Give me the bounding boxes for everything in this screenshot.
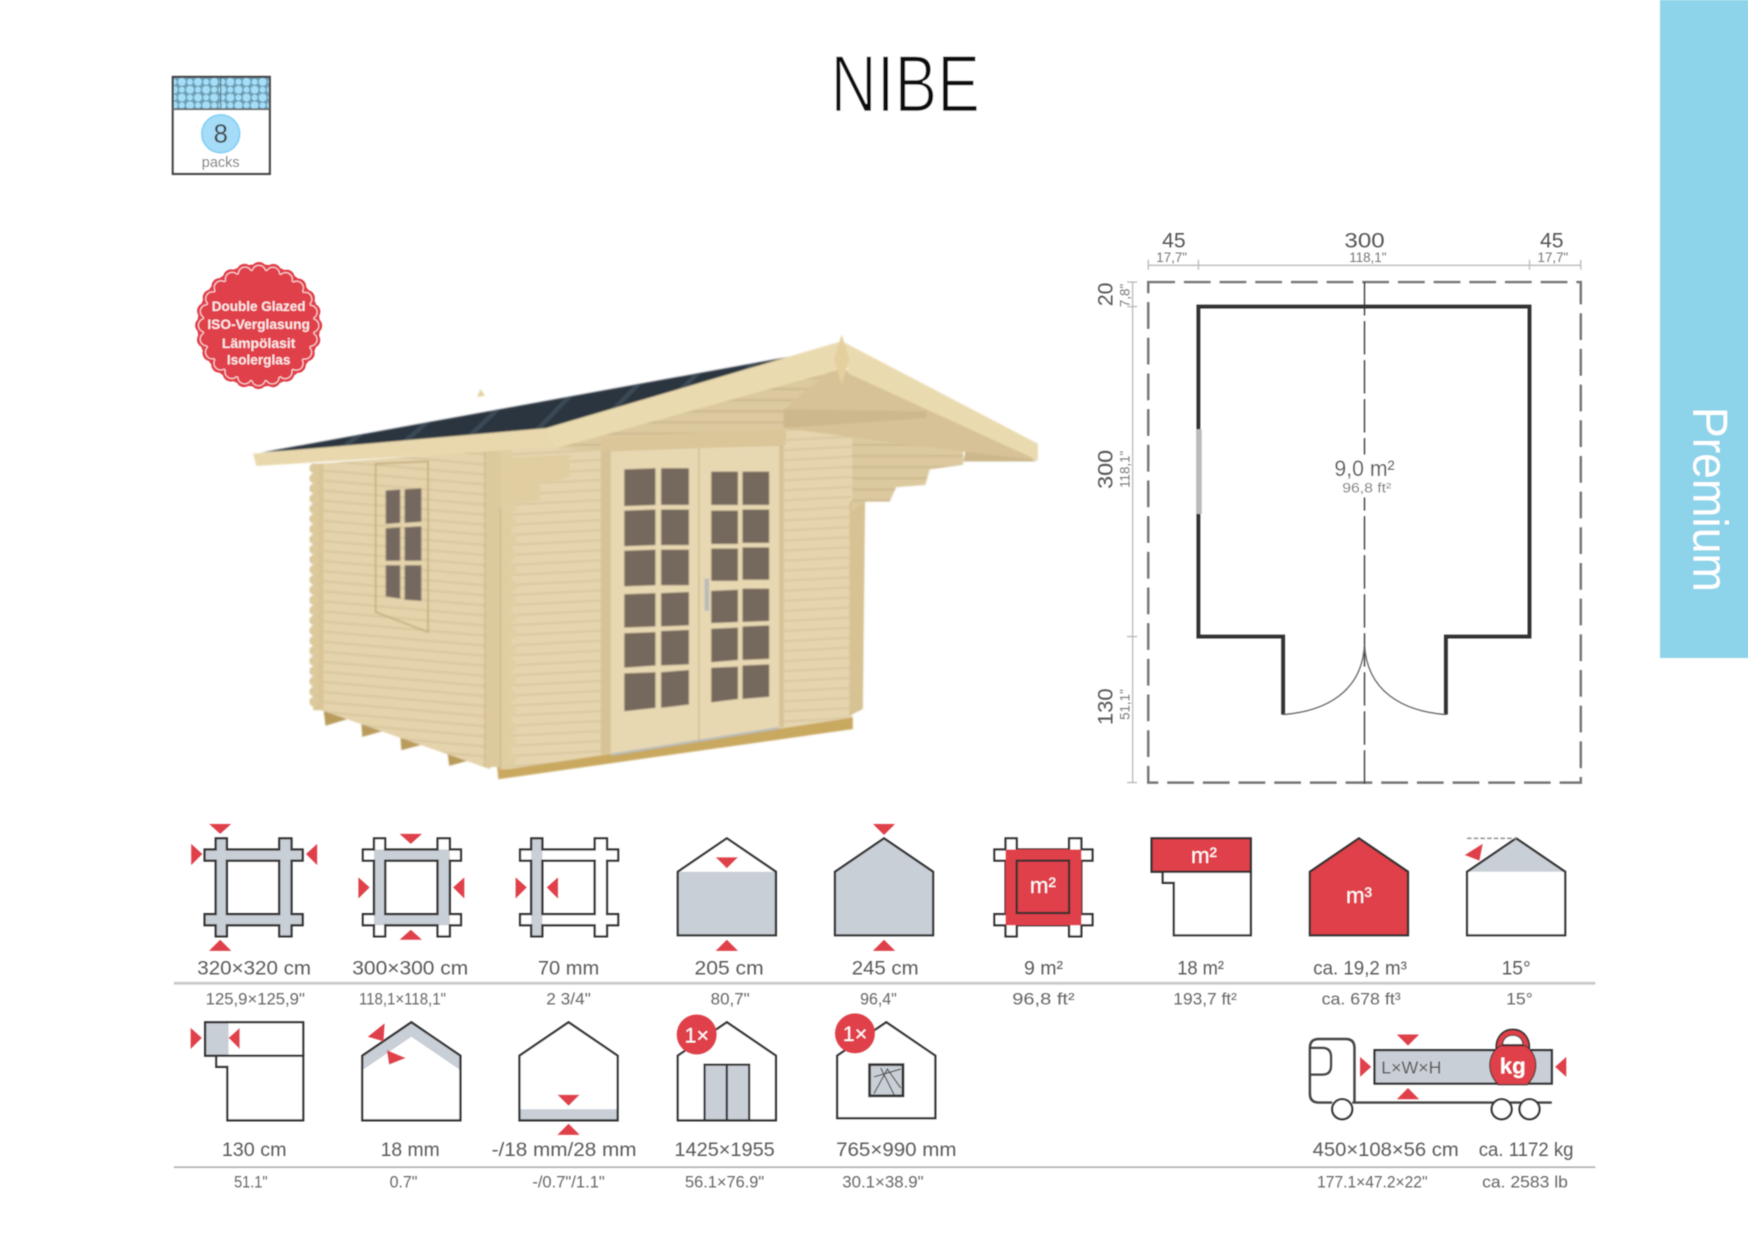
labels row 2: -/18 mm/28 mm	[492, 1140, 637, 1161]
small roof tip	[477, 389, 485, 397]
icon: inner footprint	[358, 834, 464, 940]
area label: 9,0 m²	[1334, 456, 1395, 481]
badge: double glazed: ISO-Verglasung	[207, 317, 310, 332]
left dimension: 118,1"	[1117, 450, 1132, 488]
icon: roof thickness	[362, 1022, 460, 1120]
top dimension: 45	[1540, 229, 1564, 252]
icon: 8 packs: packs	[202, 155, 240, 171]
labels row 1: 15°	[1506, 989, 1533, 1008]
labels row 2: 177.1×47.2×22"	[1317, 1172, 1428, 1191]
base board	[497, 717, 853, 779]
icon: floor thickness	[519, 1022, 618, 1135]
labels row 1: 9 m²	[1024, 958, 1063, 979]
icon: ridge height	[835, 824, 933, 951]
labels row 2: ca. 2583 lb	[1482, 1172, 1568, 1191]
labels row 1: 245 cm	[852, 958, 919, 979]
icon: wall height	[678, 838, 776, 951]
sleepers	[323, 708, 474, 766]
floor plan	[1095, 229, 1581, 785]
lintel	[601, 429, 786, 451]
labels row 2: 51.1"	[234, 1172, 268, 1191]
labels row 2: 18 mm	[381, 1140, 440, 1161]
labels row 2: 1425×1955	[674, 1140, 775, 1161]
labels row 2: 130 cm	[222, 1140, 287, 1161]
window	[376, 462, 428, 632]
window mark	[1196, 429, 1202, 514]
top dimension: 17,7"	[1538, 250, 1569, 265]
soffit	[784, 368, 1039, 460]
area label	[1334, 456, 1395, 496]
labels row 1: 96,4"	[860, 989, 897, 1008]
badge: double glazed	[197, 264, 320, 387]
icon: outer footprint	[191, 824, 317, 951]
labels row 2: -/0.7"/1.1"	[532, 1172, 605, 1191]
front wall	[499, 390, 852, 769]
labels row 2: 765×990 mm	[836, 1140, 956, 1161]
left dimension	[1095, 282, 1137, 783]
left dimension: 20	[1095, 283, 1118, 306]
badge: double glazed: Lämpölasit	[222, 336, 296, 351]
labels row 1: 193,7 ft²	[1173, 989, 1237, 1008]
left dimension: 130	[1095, 688, 1118, 725]
labels row 1: 15°	[1502, 958, 1531, 979]
icon: truck with load	[1310, 1030, 1566, 1119]
top dimension: 17,7"	[1156, 250, 1187, 265]
left dimension: 51,1"	[1117, 689, 1132, 720]
badge: double glazed: Double Glazed	[212, 299, 305, 314]
left bargeboard	[546, 341, 842, 448]
title: NIBE	[831, 39, 980, 129]
labels row 2: ca. 1172 kg	[1479, 1140, 1574, 1161]
ridge tip	[834, 334, 849, 385]
door arcs	[1283, 644, 1446, 715]
labels row 1: 320×320 cm	[197, 958, 311, 979]
centre line	[1364, 282, 1366, 785]
left dimension: 300	[1095, 450, 1118, 489]
front corner logs	[484, 448, 512, 769]
labels row 2	[174, 1140, 1595, 1191]
labels row 1: 96,8 ft²	[1012, 989, 1075, 1008]
icon: 8 packs: 8	[214, 121, 228, 149]
labels row 1: 125,9×125,9"	[206, 989, 305, 1008]
right wall end logs	[849, 502, 865, 716]
labels row 1: 300×300 cm	[352, 958, 468, 979]
labels row 1: 205 cm	[695, 958, 764, 979]
badge: double glazed: Isolerglas	[227, 353, 290, 368]
sidebar tab: Premium	[1660, 0, 1748, 658]
top dimension: 300	[1344, 229, 1385, 252]
right bargeboard	[842, 341, 1038, 460]
area label: 96,8 ft²	[1342, 481, 1392, 496]
cabin illustration	[253, 334, 1039, 779]
label patch	[1329, 455, 1400, 497]
icon: floor area	[994, 838, 1092, 936]
kettlebell: kg	[1500, 1054, 1526, 1079]
left corner logs	[313, 464, 323, 710]
doors	[601, 445, 784, 756]
top dimension: 118,1"	[1349, 250, 1387, 265]
labels row 1	[174, 958, 1595, 1008]
icon: 8 packs	[173, 77, 270, 174]
labels row 2: 0.7"	[390, 1172, 418, 1191]
gable wall above door	[556, 370, 836, 450]
icon: floor area: m²	[1030, 873, 1056, 898]
labels row 1: ca. 19,2 m³	[1313, 958, 1407, 979]
top dimension: 45	[1162, 229, 1186, 252]
icon: roof overhang	[191, 1022, 303, 1120]
icon: roof area	[1152, 838, 1251, 935]
icon: roof pitch	[1465, 838, 1565, 935]
labels row 1: 18 m²	[1177, 958, 1224, 979]
icon: volume: m³	[1346, 883, 1372, 908]
soffit beam	[784, 409, 926, 428]
icon row 2	[191, 1013, 1566, 1135]
icon: wall thickness	[516, 838, 618, 936]
icon: window	[835, 1013, 935, 1118]
labels row 1: 70 mm	[538, 958, 599, 979]
labels row 1: 80,7"	[711, 989, 750, 1008]
labels row 1: 2 3/4"	[546, 989, 591, 1008]
dark roof	[262, 356, 787, 454]
labels row 1: ca. 678 ft³	[1322, 989, 1401, 1008]
left dimension: 7,8"	[1117, 284, 1132, 307]
labels row 2: 450×108×56 cm	[1313, 1140, 1459, 1161]
labels row 2: 56.1×76.9"	[685, 1172, 764, 1191]
left wall	[318, 450, 491, 769]
icon: truck with load: L×W×H	[1381, 1058, 1441, 1078]
sidebar tab: Premium: Premium	[1682, 407, 1736, 592]
labels row 2: 30.1×38.9"	[842, 1172, 924, 1191]
icon: door: 1×	[684, 1024, 709, 1047]
icon: volume	[1310, 838, 1408, 935]
icon row 1	[191, 824, 1565, 951]
icon: window: 1×	[843, 1023, 867, 1046]
log ends near door	[504, 455, 570, 503]
icon: door	[677, 1014, 776, 1120]
walls	[1198, 307, 1530, 715]
labels row 1: 118,1×118,1"	[359, 989, 446, 1008]
icon: roof area: m²	[1191, 843, 1217, 868]
plot outline	[1148, 282, 1581, 783]
top dimension	[1148, 229, 1581, 270]
side fascia	[253, 428, 557, 466]
kettlebell	[1490, 1030, 1536, 1085]
